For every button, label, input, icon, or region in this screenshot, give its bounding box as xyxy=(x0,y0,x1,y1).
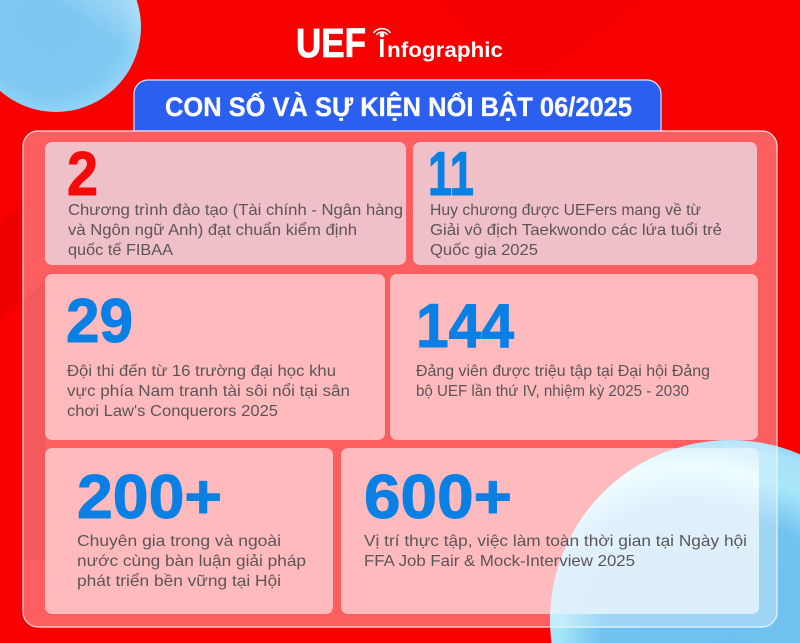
card: 2 programmes: Chương trình đào tạo (Tài chính - Ngân hàng xyxy=(68,202,403,219)
card: 11 medals xyxy=(428,140,722,259)
icon: decorative bubble bottom right xyxy=(550,440,800,643)
card: 11 medals: Giải vô địch Taekwondo các lứa tuổi trẻ xyxy=(430,221,722,239)
card: 144 party members xyxy=(416,292,710,400)
logo: UEF Infographic: UEF xyxy=(296,20,366,66)
card: 200+ experts: 200+ xyxy=(77,463,222,532)
card: 144 party members: Đảng viên được triệu tập tại Đại hội Đảng xyxy=(416,363,710,380)
card: 2 programmes: 2 xyxy=(67,140,98,209)
logo: UEF Infographic: nfographic xyxy=(387,39,503,62)
card: 29 teams: 29 xyxy=(66,287,133,356)
card: 200+ experts: nước cùng bàn luận giải pháp xyxy=(77,553,306,570)
icon: signal over i xyxy=(374,29,390,57)
card: 144 party members: 144 xyxy=(416,292,514,361)
card: 11 medals: 11 xyxy=(428,140,474,209)
card: 200+ experts: Chuyên gia trong và ngoài xyxy=(77,533,281,550)
card: 2 programmes: quốc tế FIBAA xyxy=(68,242,173,259)
card: 2 programmes xyxy=(67,140,403,259)
icon: decorative bubble top left xyxy=(0,0,141,112)
card: 600+ jobs: Vị trí thực tập, việc làm toàn thời gian tại Ngày hội xyxy=(364,533,747,550)
card: 2 programmes: và Ngôn ngữ Anh) đạt chuẩn kiểm định xyxy=(68,221,357,239)
heading: CON SỐ VÀ SỰ KIỆN NỔI BẬT 06/2025 xyxy=(165,90,632,122)
card: 600+ jobs: FFA Job Fair & Mock-Interview 2025 xyxy=(364,553,635,570)
card: 200+ experts: phát triển bền vững tại Hội xyxy=(77,572,281,590)
card: 11 medals: Huy chương được UEFers mang về từ xyxy=(430,202,701,219)
card: 29 teams: chơi Law's Conquerors 2025 xyxy=(67,403,278,420)
card: 29 teams xyxy=(66,287,350,420)
panel: main glass panel xyxy=(23,131,777,627)
title tab xyxy=(134,80,661,131)
card: 29 teams: Đội thi đến từ 16 trường đại học khu xyxy=(67,363,336,380)
card: 200+ experts xyxy=(77,463,306,590)
card: 600+ jobs: 600+ xyxy=(364,463,512,532)
card: 144 party members: bộ UEF lần thứ IV, nhiệm kỳ 2025 - 2030 xyxy=(416,383,689,400)
card: 29 teams: vực phía Nam tranh tài sôi nổi tại sân xyxy=(67,382,350,400)
card: 11 medals: Quốc gia 2025 xyxy=(430,242,538,259)
card backgrounds xyxy=(45,142,759,614)
card: 600+ jobs xyxy=(364,463,747,570)
logo: UEF Infographic xyxy=(296,20,503,66)
